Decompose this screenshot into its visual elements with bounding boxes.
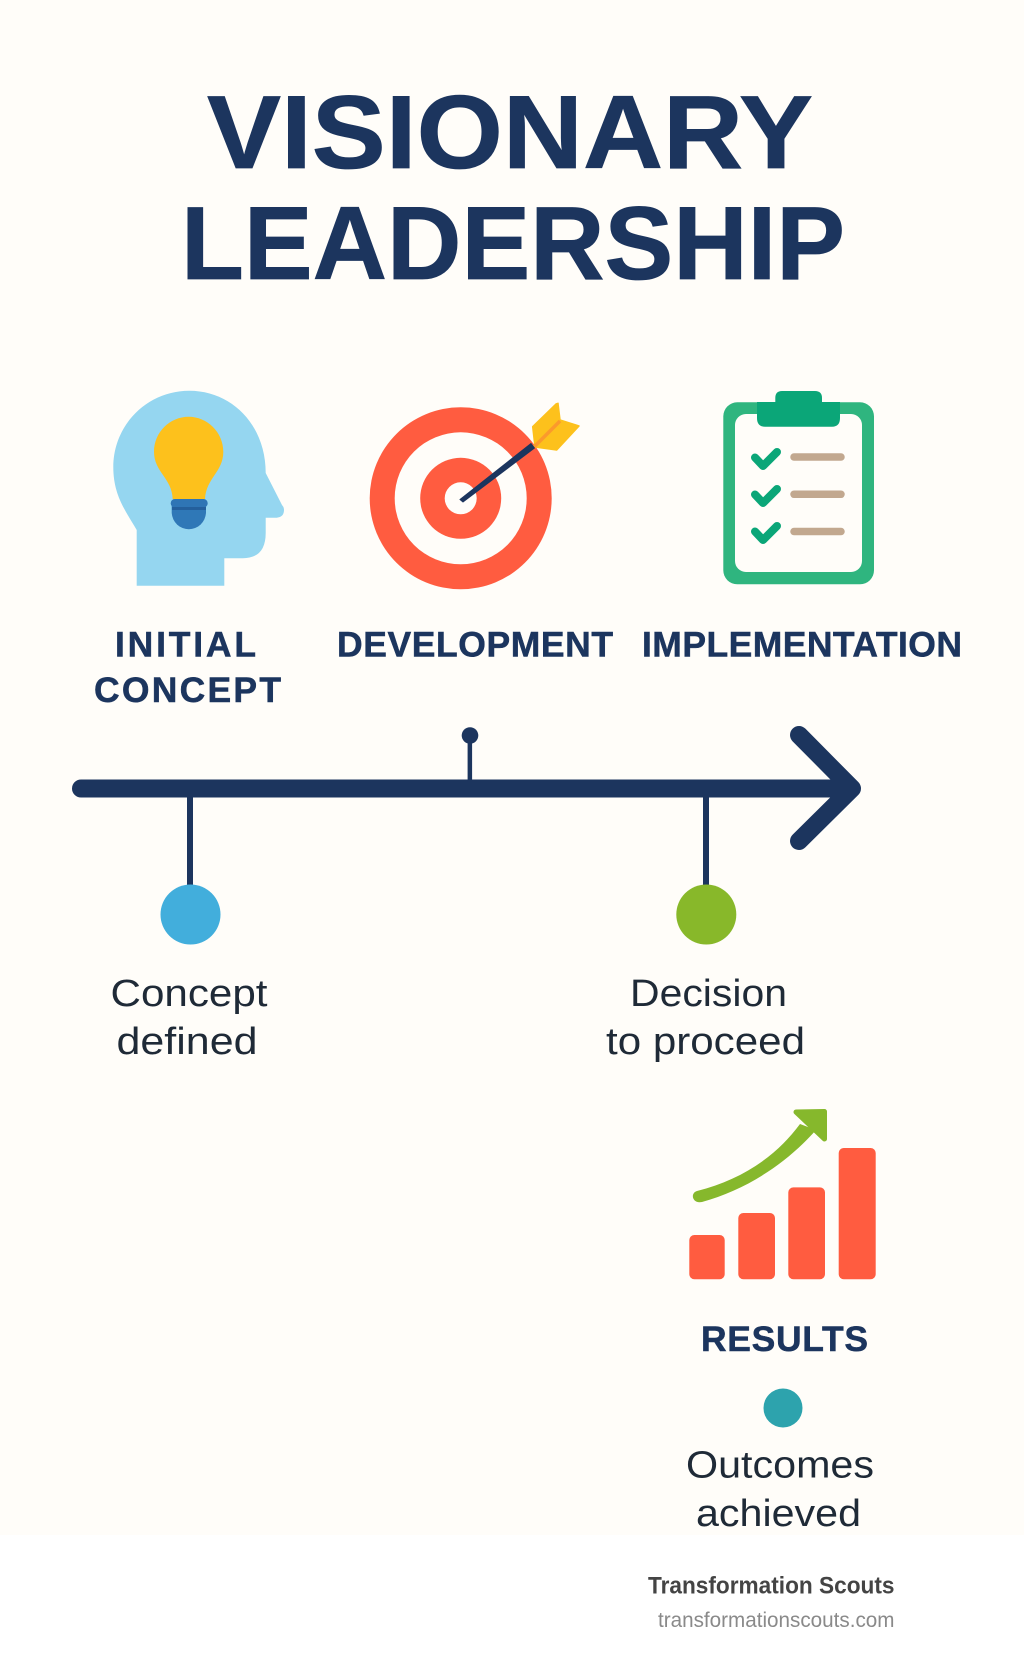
- text: decision to proceed: to proceed: [606, 1021, 805, 1063]
- footer: brand: Transformation Scouts: [648, 1572, 894, 1600]
- footer: brand: transformationscouts.com: [658, 1609, 894, 1632]
- timeline arrow: [81, 735, 852, 841]
- timeline marker: results dot: [764, 1388, 802, 1428]
- icon: clipboard checklist: [723, 391, 874, 584]
- text: outcomes achieved: achieved: [696, 1493, 861, 1535]
- title: VISIONARY: [207, 75, 813, 191]
- text: concept defined: defined: [116, 1021, 258, 1063]
- title: [181, 75, 845, 302]
- heading: initial concept: CONCEPT: [94, 670, 281, 710]
- text: decision to proceed: [606, 973, 805, 1063]
- text: outcomes achieved: [686, 1444, 874, 1535]
- timeline marker: decision to proceed: [676, 795, 736, 944]
- icon: target with dart: [370, 403, 579, 589]
- icon: rising bar chart: [689, 1112, 876, 1279]
- text: decision to proceed: Decision: [630, 973, 787, 1015]
- heading: development: DEVELOPMENT: [337, 624, 613, 664]
- text: concept defined: Concept: [110, 973, 268, 1015]
- icon: head with lightbulb: [113, 391, 284, 586]
- heading: initial concept: INITIAL: [115, 624, 256, 664]
- timeline marker: development: [462, 727, 478, 782]
- heading: results: RESULTS: [701, 1319, 868, 1359]
- heading: initial concept: [94, 624, 281, 710]
- footer: brand: [648, 1572, 894, 1632]
- heading: implementation: IMPLEMENTATION: [642, 624, 962, 664]
- timeline marker: concept defined: [160, 795, 220, 944]
- text: concept defined: [110, 973, 268, 1063]
- text: outcomes achieved: Outcomes: [686, 1444, 874, 1486]
- title: LEADERSHIP: [181, 186, 845, 302]
